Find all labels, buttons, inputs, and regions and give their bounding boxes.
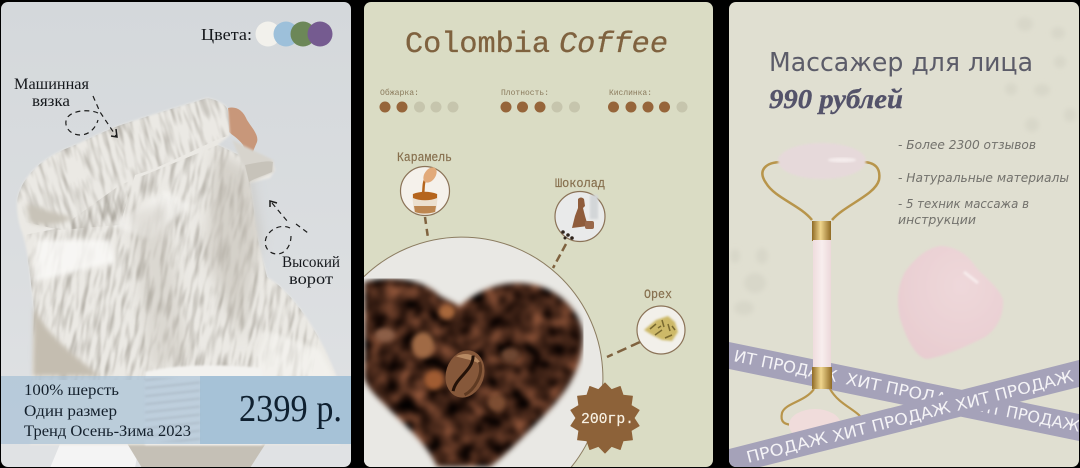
icon: chocolate	[555, 176, 605, 242]
title: Coffee	[559, 28, 668, 62]
photo: jade roller	[762, 143, 879, 441]
icon: nut	[637, 287, 685, 354]
title	[406, 30, 666, 52]
text: benefits: - Более 2300 отзывов	[898, 138, 1036, 152]
price: 990 рублей	[769, 84, 903, 114]
ribbon: hit of sales (front): ХИТ ПРОДАЖ	[830, 398, 952, 446]
panel: coffee product card	[364, 2, 713, 468]
rating: roast	[380, 89, 458, 112]
connector: nut	[607, 342, 640, 357]
photo: coffee bean	[446, 350, 484, 398]
background: faint stone shapes	[730, 17, 1076, 315]
connector: chocolate	[553, 244, 566, 268]
icon: nut: Орех	[644, 287, 672, 302]
photo: model in knitted sweater	[17, 98, 338, 467]
ribbon: hit of sales (front): ХИТ ПРОДАЖ	[953, 367, 1075, 415]
badge: weight: 200гр.	[581, 411, 634, 428]
text: sweater features	[24, 382, 191, 440]
ribbon: hit of sales (front): ПРОДАЖ	[744, 428, 829, 467]
title: Массажер для лица	[769, 48, 1033, 78]
text: sweater features: 100% шерсть	[24, 382, 119, 399]
callout: high collar: Высокий	[282, 254, 340, 271]
icon: caramel: Карамель	[397, 150, 452, 165]
rating: density: Плотность:	[501, 89, 549, 98]
text: sweater features: Один размер	[24, 403, 117, 420]
rating: acidity: Кислинка:	[609, 89, 652, 98]
icon: chocolate: Шоколад	[555, 176, 605, 191]
text: benefits: - 5 техник массажа в	[898, 197, 1029, 211]
text: benefits: - Натуральные материалы	[898, 171, 1069, 185]
text: sweater price: 2399 р.	[239, 388, 342, 430]
ribbon: hit of sales (back): ИТ ПРОДАЖ	[732, 346, 839, 386]
banner: price strip	[0, 376, 352, 444]
rating: density	[500, 89, 580, 112]
callout: machine knit: вязка	[32, 93, 70, 110]
ribbon: hit of sales (front)	[729, 360, 1079, 467]
connector: caramel	[425, 217, 428, 238]
rating: roast: Обжарка:	[380, 89, 419, 98]
callout: machine knit	[14, 76, 117, 137]
callout: high collar	[265, 201, 340, 288]
photo: rose quartz stone	[898, 246, 1003, 359]
icon: caramel	[397, 150, 452, 216]
text: sweater features: Тренд Осень-Зима 2023	[24, 423, 191, 440]
panel: face massager card	[729, 2, 1080, 467]
callout: machine knit: Машинная	[14, 76, 90, 93]
photo: coffee bean heart	[364, 237, 603, 468]
legend: colours: Цвета:	[201, 25, 252, 44]
title: Colombia	[405, 28, 550, 62]
ribbon: hit of sales (back)	[729, 342, 1080, 441]
text: benefits: инструкции	[898, 213, 976, 227]
badge: weight	[571, 383, 639, 453]
rating: acidity	[608, 89, 688, 112]
legend: colours	[201, 22, 332, 46]
ribbon: hit of sales (back): ХИТ ПРОДАЖ	[844, 369, 967, 412]
ribbon: hit of sales (back): ХИТ ПРОДАЖ	[967, 394, 1080, 436]
panel: sweater product card	[0, 0, 352, 468]
text: benefits	[898, 138, 1069, 227]
callout: high collar: ворот	[289, 271, 333, 288]
